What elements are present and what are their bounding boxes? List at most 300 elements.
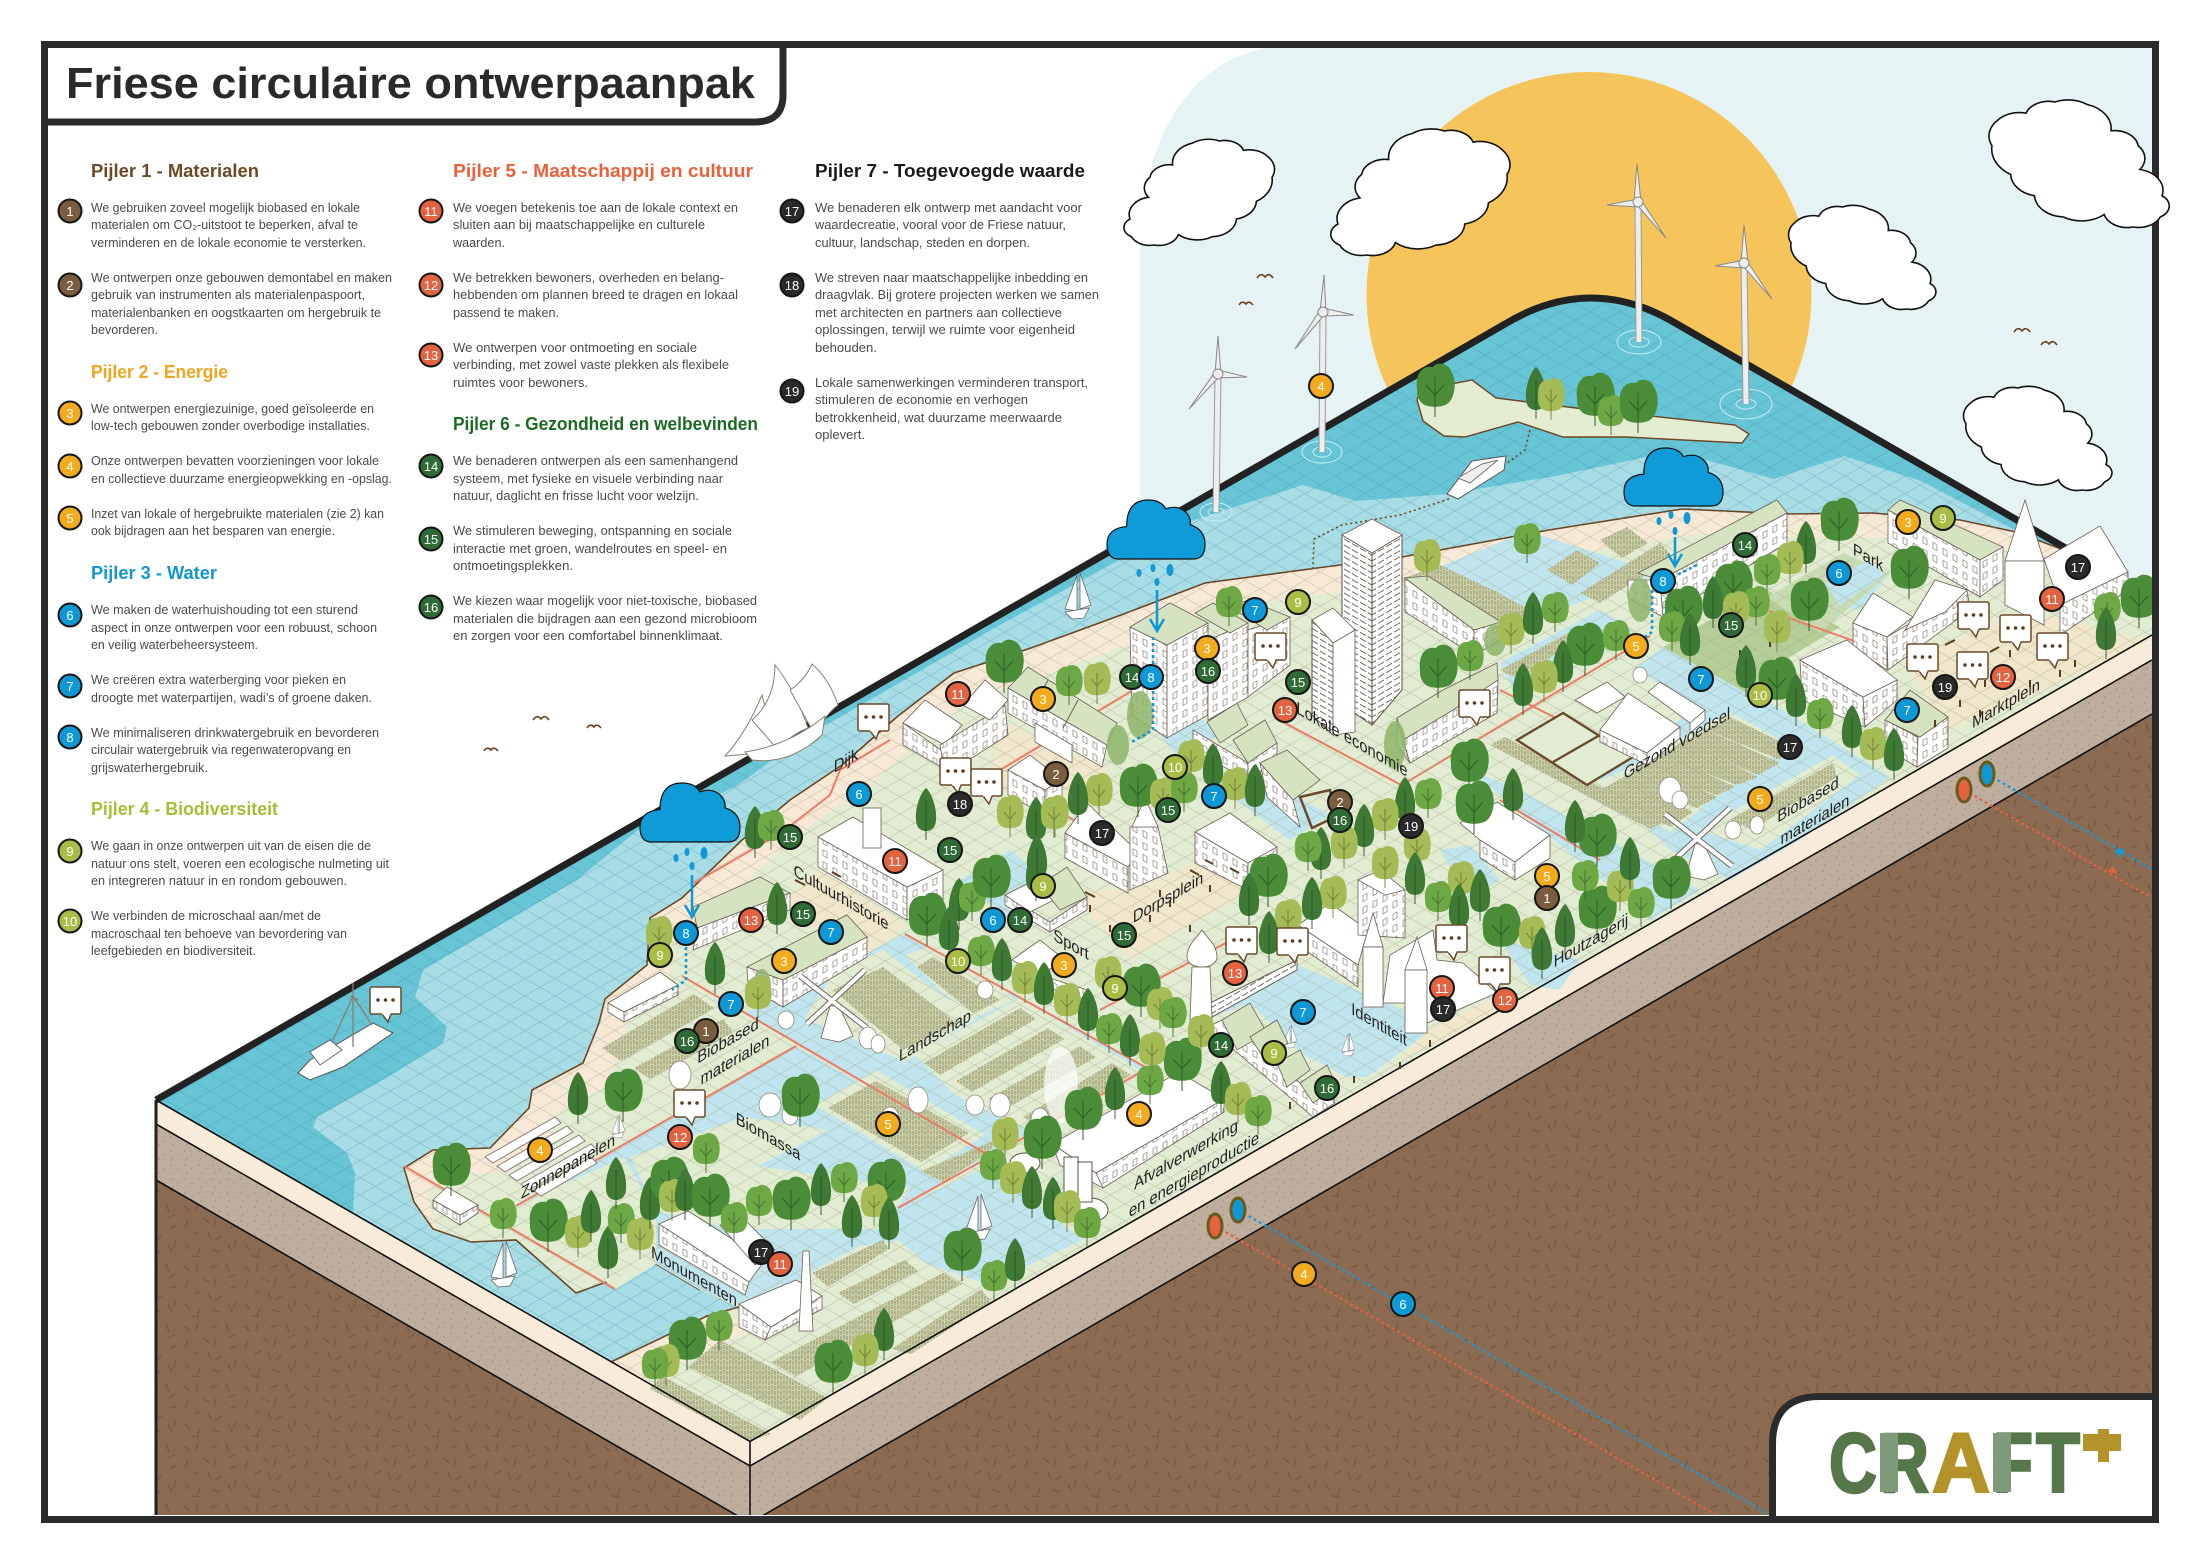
canals and water plots bbox=[516, 531, 1890, 1304]
item 17: 17 bbox=[785, 204, 799, 219]
land: inner green bbox=[426, 533, 2174, 1466]
hall dorpsplein bbox=[1195, 813, 1277, 890]
item 3: We ontwerpen energiezuinige, goed geïsoleerde en bbox=[91, 402, 374, 416]
sport houses bbox=[1005, 867, 1087, 1000]
item 15: We stimuleren beweging, ontspanning en sociale bbox=[453, 524, 732, 538]
rain cloud with drainage centre bbox=[1107, 500, 1205, 743]
second tower bbox=[1312, 608, 1355, 735]
map labels bbox=[521, 539, 2040, 1311]
item 8: We minimaliseren drinkwatergebruik en bevorderen bbox=[91, 726, 379, 740]
church marktplein bbox=[2005, 500, 2128, 635]
item 2: materialenbanken en oogstkaarten om hergebruik te bbox=[91, 306, 381, 320]
item 4: en collectieve duurzame energieopwekking en -opslag. bbox=[91, 472, 392, 486]
item 2: 2 bbox=[66, 278, 74, 293]
heading pijler 6: Pijler 6 - Gezondheid en welbevinden bbox=[453, 413, 758, 434]
map markers: 6 bbox=[1835, 566, 1843, 581]
heading pijler 7: Pijler 7 - Toegevoegde waarde bbox=[815, 160, 1085, 181]
item 8 bbox=[58, 726, 379, 775]
map markers: 18 bbox=[953, 797, 967, 812]
item 15: interactie met groen, wandelroutes en speel- en bbox=[453, 542, 727, 556]
item 10: 10 bbox=[63, 914, 77, 929]
CRAFT logo: A bbox=[1932, 1416, 1990, 1510]
sailboats bbox=[491, 573, 1355, 1287]
map markers: 2 bbox=[1336, 795, 1344, 810]
column 2: pillars 5 and 6 bbox=[420, 160, 758, 643]
row lokale economie bbox=[1397, 663, 1498, 763]
turbine 4 bbox=[1715, 225, 1772, 419]
item 15: ontmoetingsplekken. bbox=[453, 559, 573, 573]
sun bbox=[1366, 72, 1812, 388]
pond bbox=[1825, 560, 1885, 605]
solar panels bbox=[485, 1117, 597, 1196]
label Dijk: Dijk bbox=[834, 744, 859, 777]
smoke plume bbox=[1044, 1047, 1078, 1123]
heading pijler 4: Pijler 4 - Biodiversiteit bbox=[91, 798, 278, 819]
water tower bbox=[1187, 930, 1217, 1020]
stepped house bbox=[1008, 755, 1062, 815]
block edge lines bbox=[156, 635, 2152, 1523]
map markers: 17 bbox=[2071, 560, 2085, 575]
farmhouse west bbox=[608, 972, 678, 1022]
item 18: draagvlak. Bij grotere projecten werken we samen bbox=[815, 288, 1099, 302]
map markers: 2 bbox=[1052, 767, 1060, 782]
item 17: cultuur, landschap, steden en dorpen. bbox=[815, 236, 1030, 250]
map markers: 3 bbox=[780, 954, 788, 969]
item 1 bbox=[58, 200, 366, 250]
map markers: 3 bbox=[1060, 958, 1068, 973]
sea edge outline bbox=[156, 298, 2095, 1100]
label Lokale economie: Lokale economie bbox=[1296, 698, 1408, 781]
item 3: low-tech gebouwen zonder overbodige installaties. bbox=[91, 419, 370, 433]
map markers: 13 bbox=[1228, 966, 1242, 981]
map markers: 7 bbox=[727, 997, 735, 1012]
item 18: 18 bbox=[785, 278, 799, 293]
tall tower bbox=[1342, 519, 1402, 725]
map markers: 11 bbox=[888, 854, 902, 869]
island bbox=[1417, 380, 1749, 443]
item 10: leefgebieden en biodiversiteit. bbox=[91, 944, 256, 958]
item 13 bbox=[420, 341, 729, 390]
map markers: 15 bbox=[783, 830, 797, 845]
underground pipe: blue right bbox=[1980, 762, 2152, 869]
label Park: Park bbox=[1853, 539, 1884, 576]
label Dorpsplein: Dorpsplein bbox=[1133, 868, 1203, 927]
map markers: 6 bbox=[989, 913, 997, 928]
item 9: en integreren natuur in en rondom gebouwen. bbox=[91, 874, 347, 888]
map markers: 14 bbox=[1013, 913, 1027, 928]
building: row top right bbox=[1888, 500, 2003, 597]
label materialen west: materialen bbox=[701, 1030, 769, 1089]
map markers: 19 bbox=[1404, 819, 1418, 834]
item 6: aspect in onze ontwerpen voor een robuust, schoon bbox=[91, 621, 377, 635]
rain cloud with drainage west bbox=[640, 783, 740, 990]
map markers: 7 bbox=[1251, 603, 1259, 618]
title: Friese circulaire ontwerpaanpak bbox=[66, 60, 756, 108]
identiteit old town bbox=[1298, 870, 1405, 987]
underground pipe: blue left bbox=[1231, 1198, 1770, 1515]
map markers: 3 bbox=[1039, 692, 1047, 707]
map markers: 15 bbox=[1161, 803, 1175, 818]
item 5 bbox=[58, 506, 384, 538]
birds bbox=[484, 275, 2057, 751]
item 10 bbox=[58, 909, 347, 958]
map markers: 8 bbox=[1147, 670, 1155, 685]
speech bubbles bbox=[370, 602, 2068, 1125]
map markers: 17 bbox=[1095, 826, 1109, 841]
item 5: Inzet van lokale of hergebruikte materialen (zie 2) kan bbox=[91, 507, 384, 521]
church dorpsplein bbox=[1065, 798, 1168, 893]
label Marktplein: Marktplein bbox=[1972, 674, 2040, 733]
item 14: We benaderen ontwerpen als een samenhangend bbox=[453, 454, 738, 468]
cloud over frame bbox=[1989, 100, 2169, 228]
clouds bbox=[1124, 129, 2112, 490]
wind turbines bbox=[1189, 164, 1772, 521]
underground pipe: red right bbox=[1957, 778, 2152, 898]
item 5: ook bijdragen aan het besparen van energie. bbox=[91, 524, 335, 538]
label Sport: Sport bbox=[1053, 925, 1089, 964]
item 19: 19 bbox=[785, 384, 799, 399]
item 6 bbox=[58, 603, 377, 652]
block side: beige layer bbox=[156, 635, 2152, 1466]
item 4: 4 bbox=[66, 459, 74, 474]
windmills bbox=[800, 808, 1732, 1042]
long row at the dike bbox=[1628, 500, 1787, 617]
label Cultuurhistorie: Cultuurhistorie bbox=[794, 861, 888, 934]
barn bbox=[1460, 802, 1550, 880]
item 6: 6 bbox=[66, 608, 74, 623]
map markers: 9 bbox=[656, 948, 664, 963]
buildings bbox=[433, 500, 2128, 1340]
item 17: We benaderen elk ontwerp met aandacht voor bbox=[815, 201, 1082, 215]
item 1: verminderen en de lokale economie te versterken. bbox=[91, 236, 366, 250]
item 14: natuur, daglicht en frisse lucht voor welzijn. bbox=[453, 489, 699, 503]
item 4 bbox=[58, 454, 392, 486]
item 12: We betrekken bewoners, overheden en belang- bbox=[453, 271, 724, 285]
map markers: 12 bbox=[1498, 993, 1512, 1008]
item 15: 15 bbox=[424, 532, 438, 547]
map markers: 11 bbox=[951, 687, 965, 702]
waste processing barn bbox=[1052, 1072, 1224, 1188]
plot boundary lines bbox=[404, 611, 1857, 1289]
map markers: 3 bbox=[1904, 515, 1912, 530]
map markers: 11 bbox=[1435, 981, 1449, 996]
item 18: oplossingen, terwijl we ruimte voor eigenheid bbox=[815, 323, 1075, 337]
map markers: 7 bbox=[1903, 703, 1911, 718]
item 12: hebbenden om plannen breed te dragen en lokaal bbox=[453, 288, 738, 302]
label Landschap: Landschap bbox=[899, 1005, 971, 1066]
item 5: 5 bbox=[66, 511, 74, 526]
item 18: behouden. bbox=[815, 341, 877, 355]
map markers bbox=[528, 374, 2090, 1316]
map markers: 15 bbox=[1724, 618, 1738, 633]
item 14: systeem, met fysieke en visuele verbinding naar bbox=[453, 472, 723, 486]
map markers: 5 bbox=[1632, 639, 1640, 654]
map markers: 17 bbox=[1436, 1002, 1450, 1017]
item 6: We maken de waterhuishouding tot een sturend bbox=[91, 603, 358, 617]
label Zonnepanelen: Zonnepanelen bbox=[521, 1130, 615, 1203]
map markers: 19 bbox=[1938, 680, 1952, 695]
item 16: materialen die bijdragen aan een gezond microbioom bbox=[453, 612, 757, 626]
map markers: 9 bbox=[1039, 879, 1047, 894]
label Identiteit: Identiteit bbox=[1351, 999, 1407, 1050]
map markers: 11 bbox=[2045, 592, 2059, 607]
apartment block 2 bbox=[1195, 603, 1248, 720]
item 13: ruimtes voor bewoners. bbox=[453, 376, 588, 390]
item 16: We kiezen waar mogelijk voor niet-toxische, biobased bbox=[453, 594, 757, 608]
item 8: circulair watergebruik via regenwateropvang en bbox=[91, 743, 351, 757]
market squares bbox=[780, 611, 2151, 1060]
cargo ship bbox=[298, 983, 393, 1080]
map markers: 17 bbox=[754, 1245, 768, 1260]
people and benches bbox=[795, 595, 2075, 1109]
item 12 bbox=[420, 271, 738, 320]
item 12: 12 bbox=[424, 278, 438, 293]
corner house bbox=[1885, 690, 1948, 767]
item 13: We ontwerpen voor ontmoeting en sociale bbox=[453, 341, 697, 355]
label Biobased east: Biobased bbox=[1777, 772, 1839, 827]
house with timber frame bbox=[1260, 750, 1335, 828]
map markers: 15 bbox=[1117, 928, 1131, 943]
map markers: 15 bbox=[943, 843, 957, 858]
cultuurhistorie building bbox=[818, 808, 943, 920]
block left edge bbox=[154, 1100, 158, 1520]
item 2: bevorderen. bbox=[91, 323, 158, 337]
underground pipe: red left bbox=[1208, 1214, 1716, 1515]
houses east bank bbox=[1207, 1003, 1337, 1117]
item 18: met architecten en partners aan collectieve bbox=[815, 306, 1062, 320]
sea grid bbox=[161, 302, 2040, 1360]
apartment block 3 bbox=[1230, 600, 1290, 697]
rain cloud with drainage east bbox=[1624, 448, 1723, 637]
map markers: 10 bbox=[951, 954, 965, 969]
green plots between water bbox=[516, 712, 1860, 1289]
row near windmill bbox=[747, 915, 867, 1007]
deck stairs bbox=[1210, 960, 1297, 1017]
item 8: 8 bbox=[66, 730, 74, 745]
park green bbox=[1663, 590, 1840, 700]
map markers: 14 bbox=[1125, 670, 1139, 685]
map markers: 7 bbox=[1210, 789, 1218, 804]
label en energieproductie: en energieproductie bbox=[1129, 1127, 1259, 1222]
logo box bbox=[1772, 1396, 2156, 1520]
map markers: 4 bbox=[1317, 379, 1325, 394]
item 11: We voegen betekenis toe aan de lokale context en bbox=[453, 201, 738, 215]
item 17 bbox=[780, 200, 1082, 250]
block side: taupe layer bbox=[156, 660, 2152, 1523]
item 11 bbox=[420, 200, 738, 250]
hall market bbox=[1800, 640, 1897, 727]
label Biomassa: Biomassa bbox=[736, 1108, 801, 1165]
sky bbox=[1140, 48, 2152, 579]
item 19: Lokale samenwerkingen verminderen transport, bbox=[815, 376, 1088, 390]
mansion bbox=[1853, 580, 1970, 670]
map markers: 15 bbox=[1291, 675, 1305, 690]
item 8: grijswaterhergebruik. bbox=[91, 761, 208, 775]
item 11: sluiten aan bij maatschappelijke en culturele bbox=[453, 218, 705, 232]
map markers: 6 bbox=[855, 787, 863, 802]
title box bbox=[44, 44, 783, 122]
CRAFT logo: F bbox=[1993, 1416, 2033, 1510]
item 14: 14 bbox=[424, 459, 438, 474]
item 7: droogte met waterpartijen, wadi’s of groene daken. bbox=[91, 691, 372, 705]
map markers: 9 bbox=[1294, 595, 1302, 610]
CRAFT logo: C bbox=[1829, 1416, 1877, 1510]
item 1: 1 bbox=[66, 204, 74, 219]
item 1: We gebruiken zoveel mogelijk biobased en lokale bbox=[91, 201, 360, 215]
map markers: 1 bbox=[702, 1024, 710, 1039]
map markers: 9 bbox=[1111, 981, 1119, 996]
map markers: 4 bbox=[536, 1143, 544, 1158]
map markers: 3 bbox=[1203, 641, 1211, 656]
map markers: 14 bbox=[1738, 538, 1752, 553]
logo plus sign bbox=[2083, 1429, 2121, 1462]
trees bbox=[433, 364, 2159, 1393]
land: sand coast bbox=[404, 509, 2152, 1442]
item 2: We ontwerpen onze gebouwen demontabel en maken bbox=[91, 271, 392, 285]
item 19: oplevert. bbox=[815, 428, 865, 442]
shallow water band bbox=[313, 456, 2015, 1361]
map markers: 7 bbox=[827, 925, 835, 940]
bales bbox=[669, 667, 1764, 1132]
heading pijler 1: Pijler 1 - Materialen bbox=[91, 160, 259, 181]
item 4: Onze ontwerpen bevatten voorzieningen voor lokale bbox=[91, 454, 379, 468]
map markers: 7 bbox=[1697, 672, 1705, 687]
column 1: pillars 1 to 4 bbox=[58, 160, 392, 958]
item 1: materialen om CO₂-uitstoot te beperken, afval te bbox=[91, 218, 358, 232]
label materialen east: materialen bbox=[1781, 790, 1849, 849]
gabled row centre bbox=[1193, 703, 1277, 780]
label Houtzagerij: Houtzagerij bbox=[1554, 910, 1628, 971]
item 13: verbinding, met zowel vaste plekken als flexibele bbox=[453, 358, 729, 372]
item 19 bbox=[780, 376, 1088, 442]
item 14 bbox=[420, 454, 738, 503]
item 9: 9 bbox=[66, 844, 74, 859]
item 2 bbox=[58, 271, 392, 337]
map markers: 5 bbox=[884, 1117, 892, 1132]
map markers: 4 bbox=[1300, 1267, 1308, 1282]
map markers: 8 bbox=[1659, 574, 1667, 589]
turbine 2 bbox=[1295, 275, 1354, 463]
heading pijler 3: Pijler 3 - Water bbox=[91, 562, 217, 583]
map markers: 16 bbox=[1201, 664, 1215, 679]
map markers: 8 bbox=[682, 926, 690, 941]
item 18: We streven naar maatschappelijke inbedding en bbox=[815, 271, 1088, 285]
map markers: 16 bbox=[1333, 813, 1347, 828]
identiteit gate and towers bbox=[1363, 913, 1497, 1033]
CRAFT logo bbox=[1829, 1416, 2121, 1510]
map markers: 17 bbox=[1783, 740, 1797, 755]
heading pijler 2: Pijler 2 - Energie bbox=[91, 361, 228, 382]
map markers: 14 bbox=[1214, 1038, 1228, 1053]
map markers: 10 bbox=[1168, 760, 1182, 775]
item 19: betrokkenheid, wat duurzame meerwaarde bbox=[815, 411, 1062, 425]
item 11: 11 bbox=[424, 204, 438, 219]
gabled row west centre bbox=[1008, 667, 1117, 767]
item 19: stimuleren de economie en verhogen bbox=[815, 393, 1028, 407]
map markers: 5 bbox=[1756, 792, 1764, 807]
column 3: pillar 7 bbox=[780, 160, 1099, 442]
label Gezond voedsel: Gezond voedsel bbox=[1624, 703, 1730, 784]
map markers: 5 bbox=[1543, 869, 1551, 884]
monuments bbox=[659, 1211, 775, 1295]
item 9: natuur ons stelt, voeren een ecologische nulmeting uit bbox=[91, 857, 390, 871]
map markers: 15 bbox=[796, 907, 810, 922]
item 13: 13 bbox=[424, 348, 438, 363]
land grid bbox=[404, 510, 2152, 1439]
park pond field bbox=[1767, 553, 1890, 633]
item 3 bbox=[58, 402, 374, 433]
label Monumenten: Monumenten bbox=[651, 1242, 737, 1311]
map markers: 10 bbox=[1753, 688, 1767, 703]
fenced pasture bbox=[1517, 713, 1633, 785]
item 6: en veilig waterbeheersysteem. bbox=[91, 638, 258, 652]
item 10: We verbinden de microschaal aan/met de bbox=[91, 909, 321, 923]
item 11: waarden. bbox=[452, 236, 505, 250]
map markers: 7 bbox=[1299, 1005, 1307, 1020]
item 9: We gaan in onze ontwerpen uit van de eisen die de bbox=[91, 839, 371, 853]
map markers: 12 bbox=[673, 1130, 687, 1145]
farm bbox=[1575, 682, 1705, 765]
item 18 bbox=[780, 271, 1099, 355]
turbine 3 bbox=[1607, 164, 1666, 354]
CRAFT logo: T bbox=[2036, 1416, 2080, 1510]
map markers: 1 bbox=[1543, 891, 1551, 906]
turbine 1 bbox=[1189, 336, 1247, 521]
heading pijler 5: Pijler 5 - Maatschappij en cultuur bbox=[453, 160, 753, 181]
item 7: 7 bbox=[66, 679, 74, 694]
tall ship bbox=[725, 664, 838, 761]
item 7: We creëren extra waterberging voor pieken en bbox=[91, 673, 346, 687]
item 10: macroschaal ten behoeve van bevordering van bbox=[91, 927, 347, 941]
block side: soil bbox=[156, 714, 2152, 1523]
item 16 bbox=[420, 594, 757, 643]
label Afvalverwerking: Afvalverwerking bbox=[1134, 1115, 1238, 1194]
item 16: en zorgen voor een comfortabel binnenklimaat. bbox=[453, 629, 723, 643]
map markers: 13 bbox=[1278, 703, 1292, 718]
map markers: 12 bbox=[1996, 670, 2010, 685]
row with green roofs west bbox=[693, 877, 790, 950]
apartment block 1 bbox=[1130, 603, 1208, 738]
item 16: 16 bbox=[424, 600, 438, 615]
sea surface bbox=[160, 302, 2055, 1212]
map markers: 4 bbox=[1135, 1107, 1143, 1122]
map markers: 16 bbox=[1320, 1081, 1334, 1096]
item 7 bbox=[58, 673, 372, 705]
row behind tower bbox=[1405, 576, 1501, 655]
item 9 bbox=[58, 839, 390, 888]
group dike houses bbox=[903, 680, 1008, 775]
ferry route bbox=[1313, 430, 1530, 568]
item 15 bbox=[420, 524, 732, 573]
label Biobased west: Biobased bbox=[697, 1013, 759, 1068]
item 17: waardecreatie, vooral voor de Friese natuur, bbox=[814, 218, 1066, 232]
crop fields bbox=[602, 527, 1837, 1441]
map markers: 13 bbox=[744, 913, 758, 928]
vine walls bbox=[753, 578, 1652, 1001]
coastline bbox=[404, 509, 2090, 1362]
cruise ship bbox=[1447, 456, 1506, 499]
map markers: 9 bbox=[1939, 511, 1947, 526]
silos bbox=[1010, 1153, 1108, 1222]
map markers: 6 bbox=[1399, 1297, 1407, 1312]
small house south bbox=[433, 1187, 478, 1225]
item 12: passend te maken. bbox=[453, 306, 559, 320]
item 3: 3 bbox=[66, 406, 74, 421]
item 2: gebruik van instrumenten als materialenpaspoort, bbox=[91, 288, 365, 302]
map markers: 9 bbox=[1270, 1046, 1278, 1061]
CRAFT logo: R bbox=[1880, 1416, 1929, 1510]
map markers: 11 bbox=[773, 1257, 787, 1272]
